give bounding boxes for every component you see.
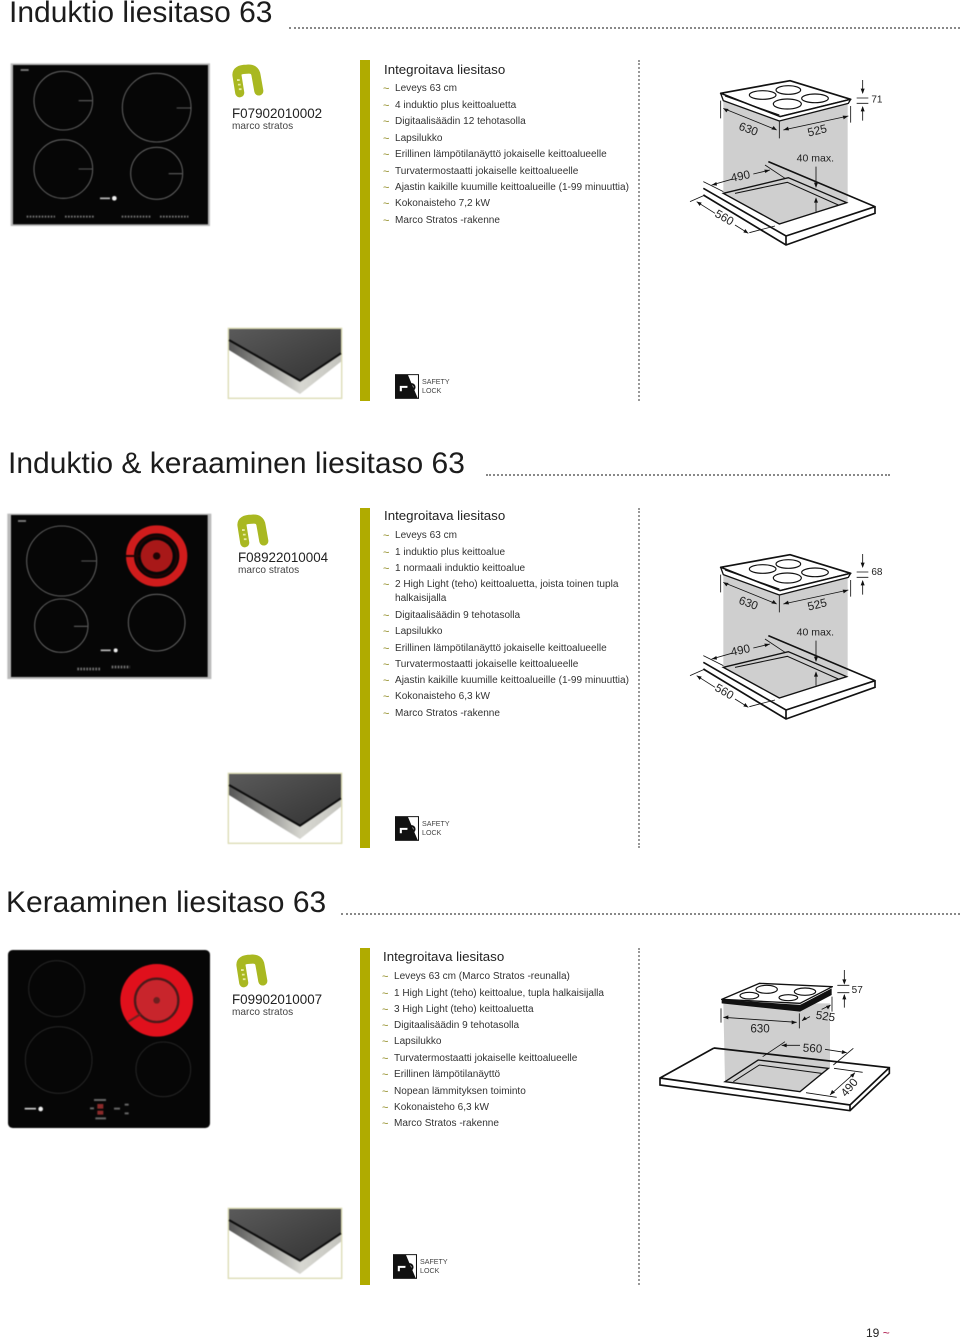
feature list: Lapsilukko xyxy=(394,1036,441,1047)
product series: marco stratos xyxy=(238,565,299,576)
label: safety lock: SAFETY xyxy=(422,378,450,386)
feature list: 4 induktio plus keittoaluetta xyxy=(395,100,516,111)
text: ~ xyxy=(382,988,388,1000)
photo: glass edge detail 2 xyxy=(227,772,343,844)
text: ~ xyxy=(382,1118,388,1130)
diagram: installation dimensions 2: 560 xyxy=(712,681,736,703)
title: section 3: Keraaminen liesitaso 63 xyxy=(6,886,326,919)
feature list: 3 High Light (teho) keittoaluetta xyxy=(394,1004,534,1015)
feature list: Ajastin kaikille kuumille keittoalueille (1-99 minuuttia) xyxy=(395,182,629,193)
text: ~ xyxy=(383,579,389,591)
diagram: installation dimensions 2 xyxy=(690,554,883,720)
title: section 2: Induktio & keraaminen liesitaso 63 xyxy=(8,447,465,480)
feature list xyxy=(382,971,604,1130)
diagram: installation dimensions 3: 57 xyxy=(852,985,863,996)
diagram: installation dimensions 1: 490 xyxy=(730,168,752,185)
heading: product type: Integroitava liesitaso xyxy=(383,948,504,964)
label: safety lock: LOCK xyxy=(422,829,441,837)
diagram: installation dimensions 2: 68 xyxy=(871,567,883,578)
label: safety lock xyxy=(422,820,450,837)
feature list: Kokonaisteho 6,3 kW xyxy=(394,1102,489,1113)
diagram: installation dimensions 1: 71 xyxy=(871,94,883,105)
feature list: Lapsilukko xyxy=(395,626,442,637)
feature list: Digitaalisäädin 9 tehotasolla xyxy=(394,1020,519,1031)
diagram: installation dimensions 1: 560 xyxy=(712,207,736,229)
heading: product type: Integroitava liesitaso xyxy=(384,62,505,76)
feature list: Marco Stratos -rakenne xyxy=(394,1118,499,1129)
label: safety lock: LOCK xyxy=(422,387,441,395)
feature list: 1 High Light (teho) keittoalue, tupla halkaisijalla xyxy=(394,988,604,998)
text: ~ xyxy=(383,691,389,703)
text: ~ xyxy=(382,1053,388,1065)
label: safety lock: LOCK xyxy=(420,1267,439,1275)
photo: ceramic hob F09902010007 xyxy=(7,949,211,1129)
diagram: installation dimensions 1: 525 xyxy=(806,122,828,140)
text: ~ xyxy=(383,530,389,542)
text: ~ xyxy=(383,708,389,720)
text: ~ xyxy=(383,100,389,112)
product code: F08922010004 xyxy=(238,550,328,564)
icon: n logo xyxy=(237,514,268,548)
diagram: installation dimensions 1: 630 xyxy=(737,120,760,139)
diagram: installation dimensions 2: 525 xyxy=(806,596,828,614)
product series: marco stratos xyxy=(232,121,293,132)
feature list: Marco Stratos -rakenne xyxy=(395,215,500,226)
feature list: Ajastin kaikille kuumille keittoalueille (1-99 minuuttia) xyxy=(395,675,629,686)
diagram: installation dimensions 3: 630 xyxy=(750,1022,770,1035)
label: safety lock: SAFETY xyxy=(422,820,450,828)
feature list: Turvatermostaatti jokaiselle keittoalueelle xyxy=(394,1053,577,1064)
icon: safety lock xyxy=(393,1254,417,1279)
feature list: Nopean lämmityksen toiminto xyxy=(394,1086,526,1096)
feature list: Turvatermostaatti jokaiselle keittoalueelle xyxy=(395,659,578,670)
label: safety lock xyxy=(420,1258,448,1275)
photo: induction and ceramic hob F08922010004 xyxy=(6,513,212,680)
feature list: Lapsilukko xyxy=(395,133,442,144)
label: safety lock xyxy=(422,378,450,395)
feature list: 1 normaali induktio keittoalue xyxy=(395,563,525,574)
photo: glass edge detail 1 xyxy=(227,327,343,400)
text: ~ xyxy=(382,1004,388,1016)
feature list xyxy=(383,530,629,720)
diagram: installation dimensions 2: 490 xyxy=(730,642,752,659)
feature list: Digitaalisäädin 9 tehotasolla xyxy=(395,610,520,621)
feature list: 2 High Light (teho) keittoaluetta, joista toinen tupla xyxy=(395,579,618,590)
text: ~ xyxy=(383,546,389,558)
feature list: Marco Stratos -rakenne xyxy=(395,708,500,719)
text: ~ xyxy=(383,166,389,178)
feature list: Erillinen lämpötilanäyttö jokaiselle keittoalueelle xyxy=(395,642,607,654)
text: ~ xyxy=(383,642,389,654)
text: ~ xyxy=(382,971,388,983)
product code: F09902010007 xyxy=(232,992,322,1006)
product series: marco stratos xyxy=(232,1007,293,1018)
text: ~ xyxy=(382,1086,388,1098)
feature list: 1 induktio plus keittoalue xyxy=(395,546,505,558)
diagram: installation dimensions 3 xyxy=(659,970,890,1112)
feature list: Erillinen lämpötilanäyttö jokaiselle keittoalueelle xyxy=(395,149,607,160)
feature list xyxy=(383,83,629,227)
text: ~ xyxy=(383,610,389,622)
feature list: Leveys 63 cm xyxy=(395,530,457,541)
heading: product type: Integroitava liesitaso xyxy=(384,508,505,522)
text: ~ xyxy=(383,675,389,687)
text: ~ xyxy=(382,1020,388,1032)
text: ~ xyxy=(383,215,389,227)
feature list: Turvatermostaatti jokaiselle keittoalueelle xyxy=(395,166,578,177)
text: ~ xyxy=(383,563,389,575)
icon: n logo xyxy=(232,64,264,98)
text: ~ xyxy=(382,1036,388,1048)
icon: n logo xyxy=(236,954,268,988)
photo: glass edge detail 3 xyxy=(227,1207,343,1280)
feature list: Leveys 63 cm (Marco Stratos -reunalla) xyxy=(394,971,570,982)
text: ~ xyxy=(383,116,389,128)
text: ~ xyxy=(383,626,389,638)
text: ~ xyxy=(383,149,389,161)
diagram: installation dimensions 3: 560 xyxy=(803,1042,823,1056)
diagram: installation dimensions 3: 525 xyxy=(815,1009,836,1024)
text: ~ xyxy=(383,198,389,210)
diagram: installation dimensions 1: 40 max. xyxy=(797,152,834,164)
diagram: installation dimensions 2: 40 max. xyxy=(797,626,834,638)
diagram: installation dimensions 3: 490 xyxy=(838,1076,861,1099)
feature list: Leveys 63 cm xyxy=(395,83,457,94)
label: safety lock: SAFETY xyxy=(420,1258,448,1266)
text: ~ xyxy=(383,182,389,194)
diagram: installation dimensions 2: 630 xyxy=(737,594,760,613)
icon: safety lock xyxy=(395,374,419,399)
text: ~ xyxy=(383,133,389,145)
photo: induction hob F07902010002 xyxy=(10,62,210,226)
text: ~ xyxy=(382,1102,388,1114)
diagram: installation dimensions 1 xyxy=(690,80,883,246)
feature list: Kokonaisteho 6,3 kW xyxy=(395,691,490,702)
feature list: Kokonaisteho 7,2 kW xyxy=(395,198,490,209)
feature list: Erillinen lämpötilanäyttö xyxy=(394,1069,500,1080)
product code: F07902010002 xyxy=(232,106,322,120)
icon: safety lock xyxy=(395,816,419,841)
text: ~ xyxy=(383,83,389,95)
feature list: halkaisijalla xyxy=(395,593,446,604)
feature list: Digitaalisäädin 12 tehotasolla xyxy=(395,116,526,127)
text: ~ xyxy=(382,1069,388,1081)
text: ~ xyxy=(383,659,389,671)
